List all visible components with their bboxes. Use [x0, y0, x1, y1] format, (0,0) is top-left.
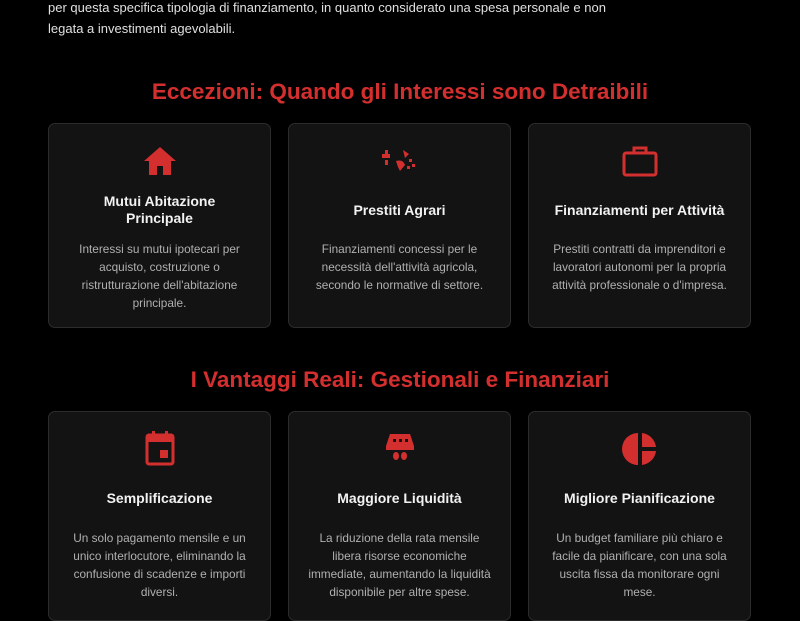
icon: briefcase [622, 146, 658, 176]
description [73, 531, 246, 599]
description: Un solo pagamento mensile e un [73, 531, 246, 545]
icon: liquidity [386, 434, 414, 460]
intro text: legata a investimenti agevolabili. [48, 21, 235, 36]
description [316, 242, 483, 292]
icon: pie chart [622, 433, 656, 465]
description: necessità dell'attività agricola, [322, 260, 477, 274]
panel: mutui [48, 123, 271, 328]
description: libera risorse economiche [332, 549, 467, 563]
title: Semplificazione [107, 490, 212, 506]
heading: eccezioni: Eccezioni: Quando gli Interessi sono Detraibili [152, 79, 648, 104]
panel: agrari [288, 123, 511, 328]
title [104, 193, 215, 226]
description: Finanziamenti concessi per le [322, 242, 477, 256]
icon: house [144, 147, 176, 175]
title: Prestiti Agrari [353, 202, 446, 218]
description: Un budget familiare più chiaro e [556, 531, 723, 545]
description: La riduzione della rata mensile [319, 531, 480, 545]
title: Maggiore Liquidità [337, 490, 462, 506]
panel: attività [528, 123, 751, 328]
icon: agriculture [382, 150, 415, 171]
description [552, 531, 727, 599]
description: ristrutturazione dell'abitazione [82, 278, 237, 292]
description: Prestiti contratti da imprenditori e [553, 242, 726, 256]
panel: semplificazione [48, 411, 271, 621]
intro text: per questa specifica tipologia di finanziamento, in quanto considerato una spesa personale e non [48, 0, 606, 15]
description: uscita fissa da monitorare ogni [560, 567, 720, 581]
description [552, 242, 727, 292]
intro text [48, 0, 606, 36]
description: mese. [623, 585, 656, 599]
description: attività professionale o d'impresa. [552, 278, 727, 292]
title: Migliore Pianificazione [564, 490, 715, 506]
description: facile da pianificare, con una sola [552, 549, 727, 563]
description [79, 242, 240, 310]
description: principale. [133, 296, 186, 310]
description [308, 531, 491, 599]
description: Interessi su mutui ipotecari per [79, 242, 240, 256]
description: acquisto, costruzione o [99, 260, 220, 274]
title: Principale [126, 210, 193, 226]
panel: pianificazione [528, 411, 751, 621]
title: Mutui Abitazione [104, 193, 215, 209]
panel: liquidità [288, 411, 511, 621]
heading: vantaggi: I Vantaggi Reali: Gestionali e Finanziari [191, 367, 609, 392]
description: disponibile per altre spese. [329, 585, 470, 599]
icon: calendar [146, 431, 174, 466]
description: secondo le normative di settore. [316, 278, 483, 292]
title: Finanziamenti per Attività [555, 202, 724, 218]
description: immediate, aumentando la liquidità [308, 567, 491, 581]
description: confusione di scadenze e importi [74, 567, 245, 581]
description: diversi. [141, 585, 178, 599]
description: unico interlocutore, eliminando la [73, 549, 246, 563]
description: lavoratori autonomi per la propria [553, 260, 726, 274]
